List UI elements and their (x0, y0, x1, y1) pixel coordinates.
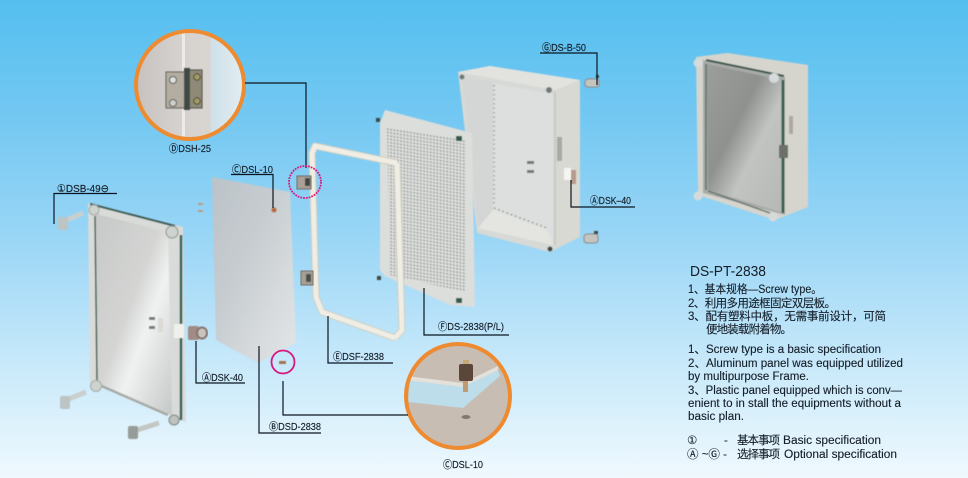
label: DSF-2838 (328, 316, 393, 363)
label: DS-2838(P/L): ⒻDS-2838(P/L) (438, 321, 504, 333)
icon: hinge on frame upper (297, 176, 311, 189)
text block: Chinese specs (688, 282, 886, 336)
label: DSL-10 top (231, 164, 273, 208)
product photo: assembled enclosure (694, 53, 808, 222)
text block: English specs: 3、Plastic panel equipped which is conv— (688, 385, 902, 397)
label: DSD-2838: ⒷDSD-2838 (269, 421, 321, 433)
callout: screw detail DSL-10 (404, 342, 512, 450)
legend: - (724, 435, 728, 447)
text block: English specs (688, 344, 903, 423)
text block: Chinese specs: 2、利用多用途框固定双层板。 (688, 296, 836, 310)
legend: 选择事项 (737, 447, 780, 461)
legend: Basic specification (783, 435, 881, 447)
label: DSB-49 (54, 183, 117, 224)
perforated mounting plate (376, 110, 475, 307)
frame DSF-2838 (312, 146, 402, 338)
legend (687, 433, 897, 461)
legend: Ⓐ ~Ⓖ - (687, 448, 727, 461)
text block: English specs: basic plan. (688, 411, 744, 423)
enclosure base (458, 66, 599, 252)
label: DS-2838(P/L) (424, 288, 509, 335)
icon: panel screw (198, 203, 276, 212)
label: DSF-2838: ⒺDSF-2838 (333, 351, 384, 363)
icon: latch DSK-40 (188, 326, 207, 340)
icon: screw knobs (58, 213, 159, 439)
marker: pink circle screw (272, 350, 294, 374)
label: DS-B-50: ⒼDS-B-50 (542, 42, 586, 54)
label: DS-B-50 (540, 42, 597, 85)
text block: Chinese specs: 3、配有塑料中板，无需事前设计，可简 (688, 309, 886, 323)
text block: English specs: 1、Screw type is a basic specification (688, 344, 881, 356)
leader: hinge (245, 83, 306, 168)
heading: model name: DS-PT-2838 (690, 264, 766, 280)
inner metal panel (212, 177, 296, 363)
label: DSK-40 left: ⒶDSK-40 (202, 372, 243, 384)
label: DSD-2838 (259, 346, 321, 433)
label: DSL-10 bottom: ⒸDSL-10 (443, 459, 483, 471)
leader: screw to detail (283, 381, 408, 415)
label: DSH-25: ⒹDSH-25 (169, 143, 211, 155)
label: DSK-40 right: ⒶDSK–40 (590, 195, 631, 207)
text block: Chinese specs: 便地装载附着物。 (706, 322, 792, 336)
callout: hinge detail DSH-25 (134, 29, 246, 141)
text block: English specs: enient to in stall the equipments without a (688, 398, 902, 410)
icon: hinge on frame lower (301, 271, 313, 285)
transparent cover (88, 203, 186, 425)
legend: ① (687, 435, 697, 447)
legend: 基本事项 (737, 433, 780, 447)
text block: Chinese specs: 1、基本规格—Screw type。 (688, 282, 822, 296)
label: DSK-40 left (196, 341, 245, 384)
text block: English specs: 2、Aluminum panel was equipped utilized (688, 358, 903, 370)
label: DSB-49: ①DSB-49⊖ (57, 183, 109, 195)
legend: Optional specification (784, 449, 897, 461)
label: DSK-40 right (571, 180, 635, 207)
label: DSL-10 top: ⒸDSL-10 (232, 164, 273, 176)
marker: pink circle hinge (289, 166, 321, 198)
text block: English specs: by multipurpose Frame. (688, 371, 809, 383)
